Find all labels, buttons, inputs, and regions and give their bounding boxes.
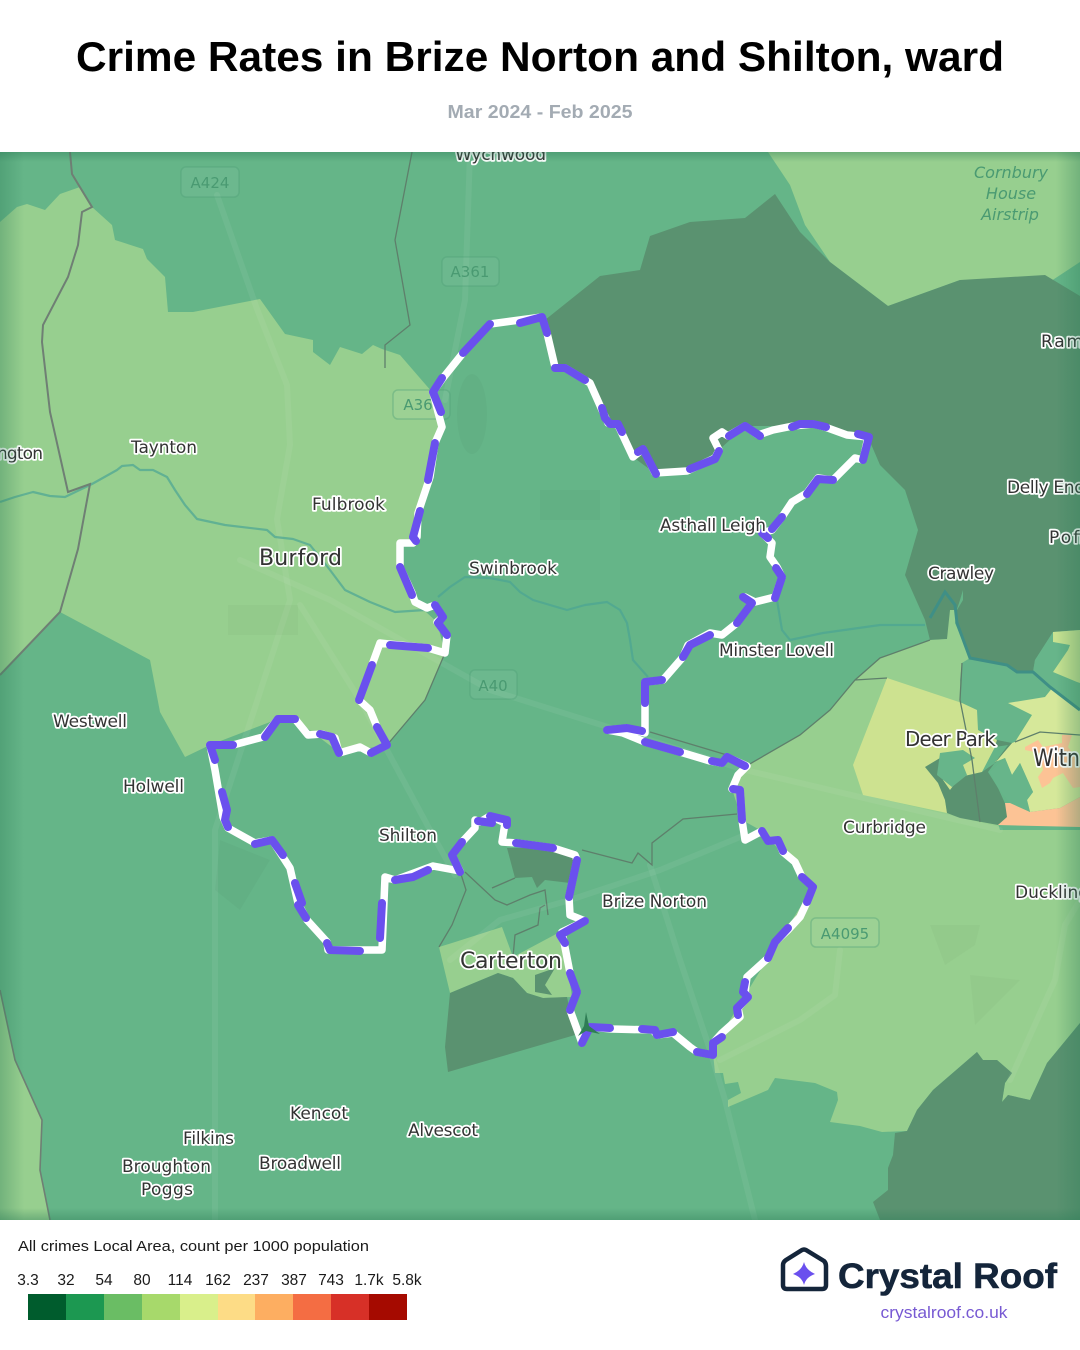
region: dark north-east: [545, 194, 1080, 672]
label: Cornbury House Airstrip: [974, 163, 1049, 224]
place labels: Shilton: [379, 826, 437, 846]
logo wordmark: Crystal Roof: [838, 1257, 1057, 1296]
place labels: Wychwood: [455, 145, 546, 165]
legend tick labels: 237: [243, 1272, 269, 1289]
place labels: Brize Norton: [602, 892, 707, 912]
place labels: Carterton: [460, 949, 562, 974]
region: light east around Curbridge: [713, 610, 1080, 1132]
legend tick labels: 114: [168, 1272, 193, 1289]
place labels: Broadwell: [259, 1154, 341, 1174]
legend tick labels: 5.8k: [392, 1272, 422, 1289]
region: light west around Burford: [0, 187, 445, 757]
panel: choropleth map: [0, 145, 1080, 1220]
label: Cornbury House Airstrip: Airstrip: [980, 205, 1039, 224]
legend: [17, 1238, 422, 1320]
map boundary lines: [0, 152, 930, 865]
road label: A424: A424: [191, 174, 229, 192]
road labels: [181, 167, 879, 947]
river Windrush: [0, 465, 1080, 710]
legend tick labels: 162: [205, 1272, 231, 1289]
ward boundary: dashed purple on white: [210, 317, 869, 1055]
road label: A40: [470, 670, 517, 699]
place labels: Minster Lovell: [719, 641, 834, 661]
icon: house with sparkle: [783, 1250, 826, 1289]
place labels: Deer Park: [905, 727, 996, 751]
road label: A424: [181, 167, 239, 197]
map woodland patches: [215, 374, 1020, 1025]
place labels: Holwell: [123, 777, 184, 797]
place labels: Swinbrook: [469, 559, 557, 579]
legend tick labels: 80: [133, 1272, 151, 1289]
label: Cornbury House Airstrip: House: [986, 184, 1036, 203]
road label: A361: [442, 257, 499, 286]
legend tick labels: 3.3: [17, 1272, 39, 1289]
place labels: Filkins: [183, 1129, 234, 1149]
region: Witney wards: [853, 630, 1080, 827]
subtitle: date range: Mar 2024 - Feb 2025: [448, 102, 632, 122]
legend title: All crimes Local Area, count per 1000 population: [18, 1238, 369, 1255]
place labels: Curbridge: [843, 818, 926, 838]
title: Crime Rates in Brize Norton and Shilton, ward: [76, 33, 1004, 80]
place labels: Burford: [259, 546, 342, 571]
place labels: Kencot: [290, 1104, 348, 1124]
place labels: Fulbrook: [312, 495, 385, 515]
place labels: Taynton: [130, 438, 197, 458]
map edge vignette: [0, 152, 1080, 1220]
legend tick labels: 54: [95, 1272, 113, 1289]
place labels: Westwell: [53, 712, 127, 732]
region: south-west light corner: [0, 990, 50, 1220]
place labels: Poggs: [141, 1180, 193, 1200]
road label: A40: A40: [478, 677, 508, 695]
logo url: crystalroof.co.uk: [880, 1304, 1008, 1322]
place labels: Alvescot: [408, 1121, 478, 1141]
place labels: Broughton: [122, 1157, 211, 1177]
region: Carterton wards: [439, 848, 577, 1072]
legend tick labels: 32: [57, 1272, 75, 1289]
legend tick labels: 387: [281, 1272, 307, 1289]
road label: A4095: [811, 918, 879, 947]
legend tick labels: 743: [318, 1272, 344, 1289]
road label: A361 partly hidden: [393, 390, 450, 419]
road label: A361 partly hidden: A36: [403, 396, 433, 414]
region: light north-east: [768, 152, 1080, 306]
icon: airfield marker: [578, 1012, 600, 1036]
place labels: Asthall Leigh: [660, 516, 766, 536]
road label: A361: A361: [451, 263, 489, 281]
road label: A4095: A4095: [821, 925, 869, 943]
label: Cornbury House Airstrip: Cornbury: [974, 163, 1049, 182]
region: far south-east dark: [873, 1023, 1080, 1220]
legend tick labels: 1.7k: [354, 1272, 384, 1289]
place labels: [0, 145, 1080, 1200]
legend tick labels: [17, 1272, 422, 1289]
legend colour scale: [28, 1294, 407, 1320]
logo: Crystal Roof: [783, 1250, 1057, 1322]
map roads: [215, 152, 1080, 1220]
place labels: Crawley: [928, 564, 994, 584]
